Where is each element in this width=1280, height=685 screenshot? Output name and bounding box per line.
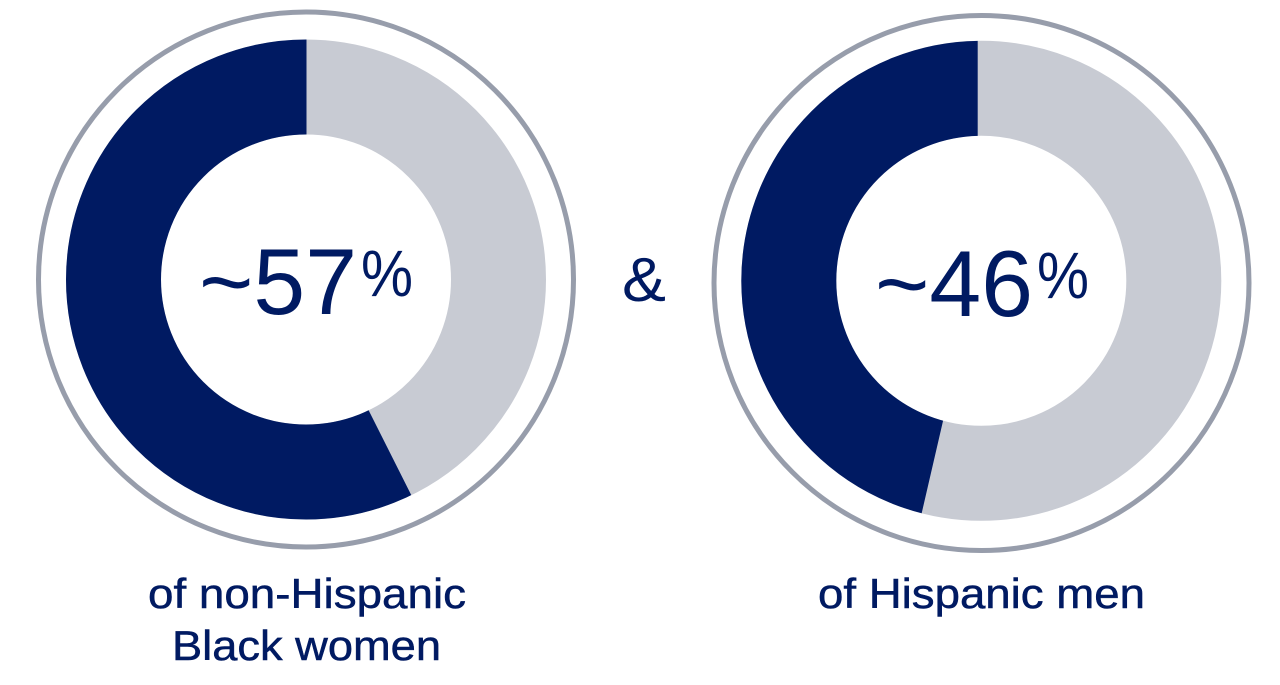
ampersand: & [622, 246, 666, 315]
donut remainder: left [114, 87, 498, 472]
donut chart: 57 percent [114, 87, 498, 472]
outer ring: right [714, 16, 1249, 550]
donut chart: 46 percent [789, 88, 1174, 473]
label: Hispanic men: of Hispanic men [818, 570, 1145, 617]
donut remainder: right [789, 88, 1174, 473]
label: non-Hispanic Black women: Black women [172, 622, 441, 669]
donut segment: 57 percent [114, 87, 498, 472]
panel: Hispanic men [714, 16, 1249, 617]
outer ring: left [38, 12, 574, 547]
donut segment: 46 percent [741, 40, 978, 514]
label: non-Hispanic Black women [148, 570, 466, 669]
label: non-Hispanic Black women: of non-Hispanic [148, 570, 466, 617]
value: about 57 percent: ~57 [199, 229, 357, 334]
value: about 57 percent: % [361, 236, 413, 310]
value: about 46 percent: ~46 [875, 231, 1033, 336]
panel: non-Hispanic Black women [38, 12, 574, 669]
value: about 46 percent: % [1037, 238, 1089, 312]
